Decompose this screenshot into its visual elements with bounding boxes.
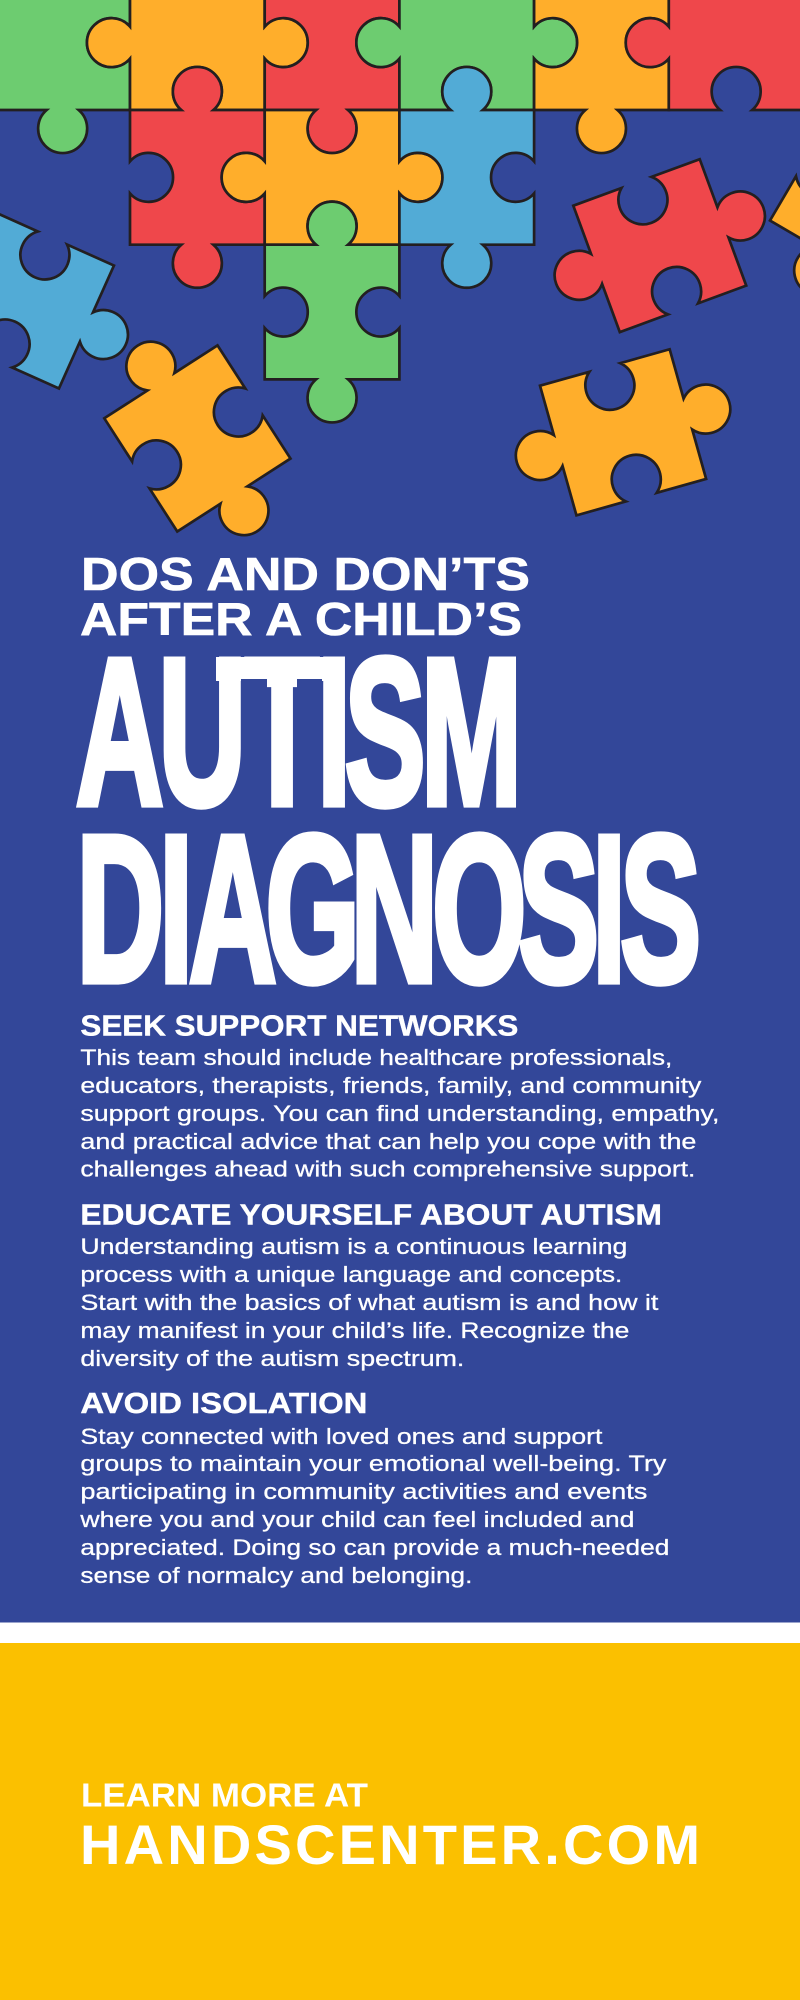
body text: support groups. You can find understanding, empathy, <box>80 1101 719 1126</box>
heading: AVOID ISOLATION <box>80 1388 367 1420</box>
puzzle piece: green top row 1 <box>0 0 130 153</box>
body text: Stay connected with loved ones and support <box>80 1424 603 1449</box>
puzzle piece: orange top row 2 <box>87 0 308 110</box>
puzzle piece: loose orange left <box>81 309 314 568</box>
illustration: puzzle pieces <box>0 0 800 568</box>
body text: This team should include healthcare professionals, <box>80 1045 672 1070</box>
body text <box>79 1424 669 1588</box>
panel: yellow footer <box>0 1643 800 2000</box>
title: small heading: AFTER A CHILD’S <box>80 593 522 645</box>
puzzle piece: loose red right <box>533 144 787 347</box>
puzzle piece: orange second row <box>222 110 442 245</box>
white divider band <box>0 1622 800 1643</box>
body text: sense of normalcy and belonging. <box>80 1563 472 1588</box>
body text: Start with the basics of what autism is and how it <box>80 1290 659 1315</box>
body text <box>80 1045 719 1182</box>
puzzle piece: red second row <box>130 67 265 288</box>
body text: process with a unique language and concepts. <box>80 1262 622 1287</box>
body text: diversity of the autism spectrum. <box>80 1346 464 1371</box>
body text: participating in community activities and events <box>80 1479 647 1504</box>
puzzle piece: green top row 4 <box>356 0 577 110</box>
footer label: LEARN MORE AT <box>81 1776 368 1814</box>
puzzle piece: loose orange cut off at right edge <box>748 104 800 326</box>
body text: challenges ahead with such comprehensive support. <box>80 1156 695 1182</box>
body text: and practical advice that can help you cope with the <box>80 1129 696 1154</box>
puzzle piece: orange top row 5 <box>534 0 669 153</box>
body text: educators, therapists, friends, family, and community <box>80 1073 702 1098</box>
section: educate yourself about autism <box>80 1200 662 1371</box>
puzzle piece: red top row 6 <box>626 0 800 110</box>
body text: groups to maintain your emotional well-being. Try <box>80 1451 667 1476</box>
body text: Understanding autism is a continuous learning <box>80 1234 627 1259</box>
puzzle piece: red top row 3 <box>265 0 399 153</box>
puzzle piece: green third row <box>265 202 399 422</box>
body text: appreciated. Doing so can provide a much-needed <box>80 1535 669 1560</box>
body text <box>80 1234 659 1371</box>
title: AUTISM: AUTISM <box>76 616 522 849</box>
puzzle piece: blue second row <box>399 67 534 288</box>
puzzle piece: loose orange right <box>499 338 748 527</box>
section: seek support networks <box>80 1010 719 1182</box>
title: DIAGNOSIS: DIAGNOSIS <box>77 793 701 1026</box>
body text: where you and your child can feel included and <box>79 1507 634 1532</box>
footer website: HANDSCENTER.COM <box>80 1813 700 1876</box>
title: small heading: DOS AND DON’TS <box>81 548 530 600</box>
body text: may manifest in your child’s life. Recognize the <box>80 1318 629 1343</box>
section: avoid isolation <box>79 1388 669 1588</box>
heading: EDUCATE YOURSELF ABOUT AUTISM <box>80 1200 662 1232</box>
puzzle piece: loose blue left <box>0 210 153 406</box>
heading: SEEK SUPPORT NETWORKS <box>80 1010 518 1042</box>
title: small heading <box>80 548 530 645</box>
